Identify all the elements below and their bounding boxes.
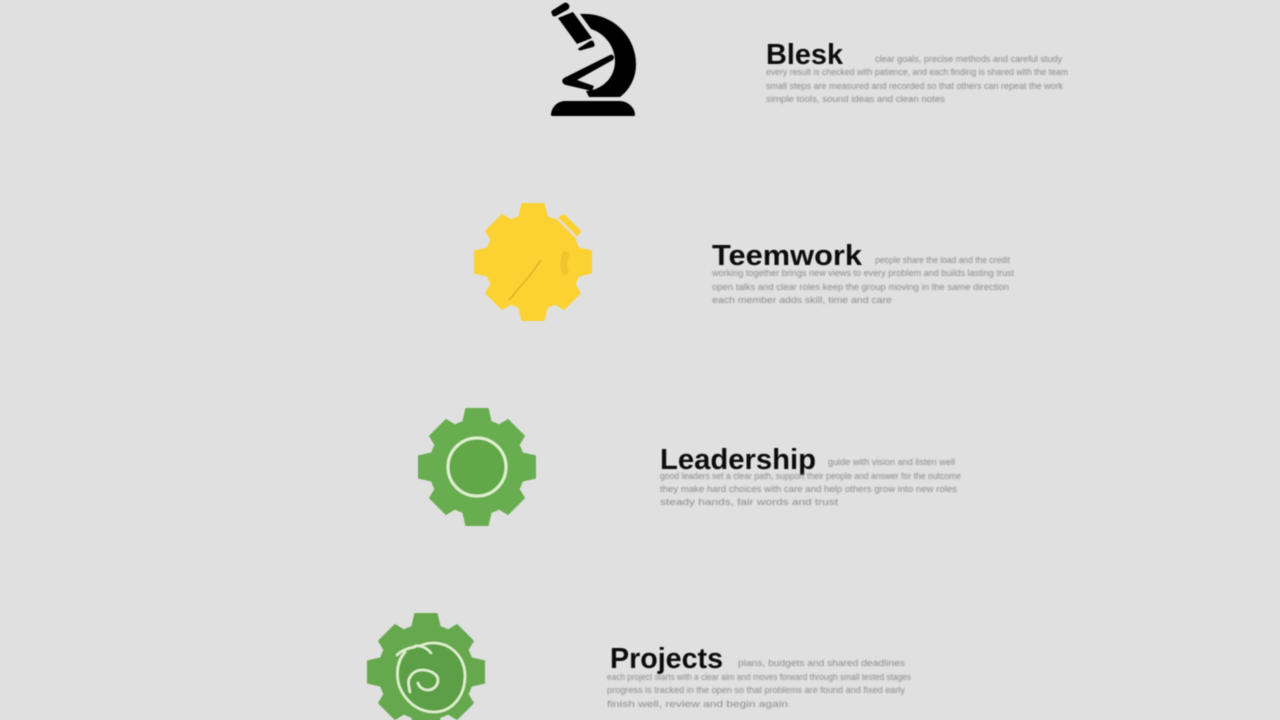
body text: Teemwork: each member adds skill, time and care [712,295,892,305]
inner ring [448,438,506,496]
body text: Blesk: clear goals, precise methods and careful study [875,54,1062,64]
icon: green gear with spiral [367,613,485,720]
icon: green gear with ring [418,408,536,526]
text block: Projects [607,643,911,709]
spiral [397,643,465,712]
body text: Leadership: guide with vision and listen well [828,457,955,467]
text block: Blesk [766,39,1068,104]
text block: Leadership [660,444,961,507]
icon: yellow gear [474,203,592,321]
body text: Blesk: simple tools, sound ideas and clean notes [766,94,946,104]
heading: Projects: Projects [610,643,723,675]
body text: Projects: progress is tracked in the open so that problems are found and fixed early [607,685,906,695]
heading: Leadership: Leadership [660,444,816,476]
body text: Projects: plans, budgets and shared deadlines [738,658,906,668]
body text: Leadership: steady hands, fair words and trust [660,497,839,507]
body text: Teemwork: working together brings new views to every problem and builds lasting trust [711,268,1014,278]
body text: Projects: each project starts with a clear aim and moves forward through small tested stages [607,672,911,682]
heading: Teemwork: Teemwork [712,240,863,272]
body text: Blesk: every result is checked with patience, and each finding is shared with the team [766,67,1068,77]
body text: Leadership: good leaders set a clear path, support their people and answer for the outcome [660,471,961,481]
heading: Blesk: Blesk [766,39,844,71]
body text: Leadership: they make hard choices with care and help others grow into new roles [660,484,958,494]
body text: Teemwork: open talks and clear roles keep the group moving in the same direction [712,282,1009,292]
body text: Leadership [660,457,961,507]
body text: Teemwork: people share the load and the credit [875,255,1010,265]
body text: Blesk [766,54,1068,104]
text block: Teemwork [711,240,1014,305]
body text: Projects [607,658,911,709]
body text: Teemwork [711,255,1014,305]
icon: microscope [551,3,636,116]
body text: Projects: finish well, review and begin again [607,699,788,709]
body text: Blesk: small steps are measured and recorded so that others can repeat the work [766,81,1063,91]
